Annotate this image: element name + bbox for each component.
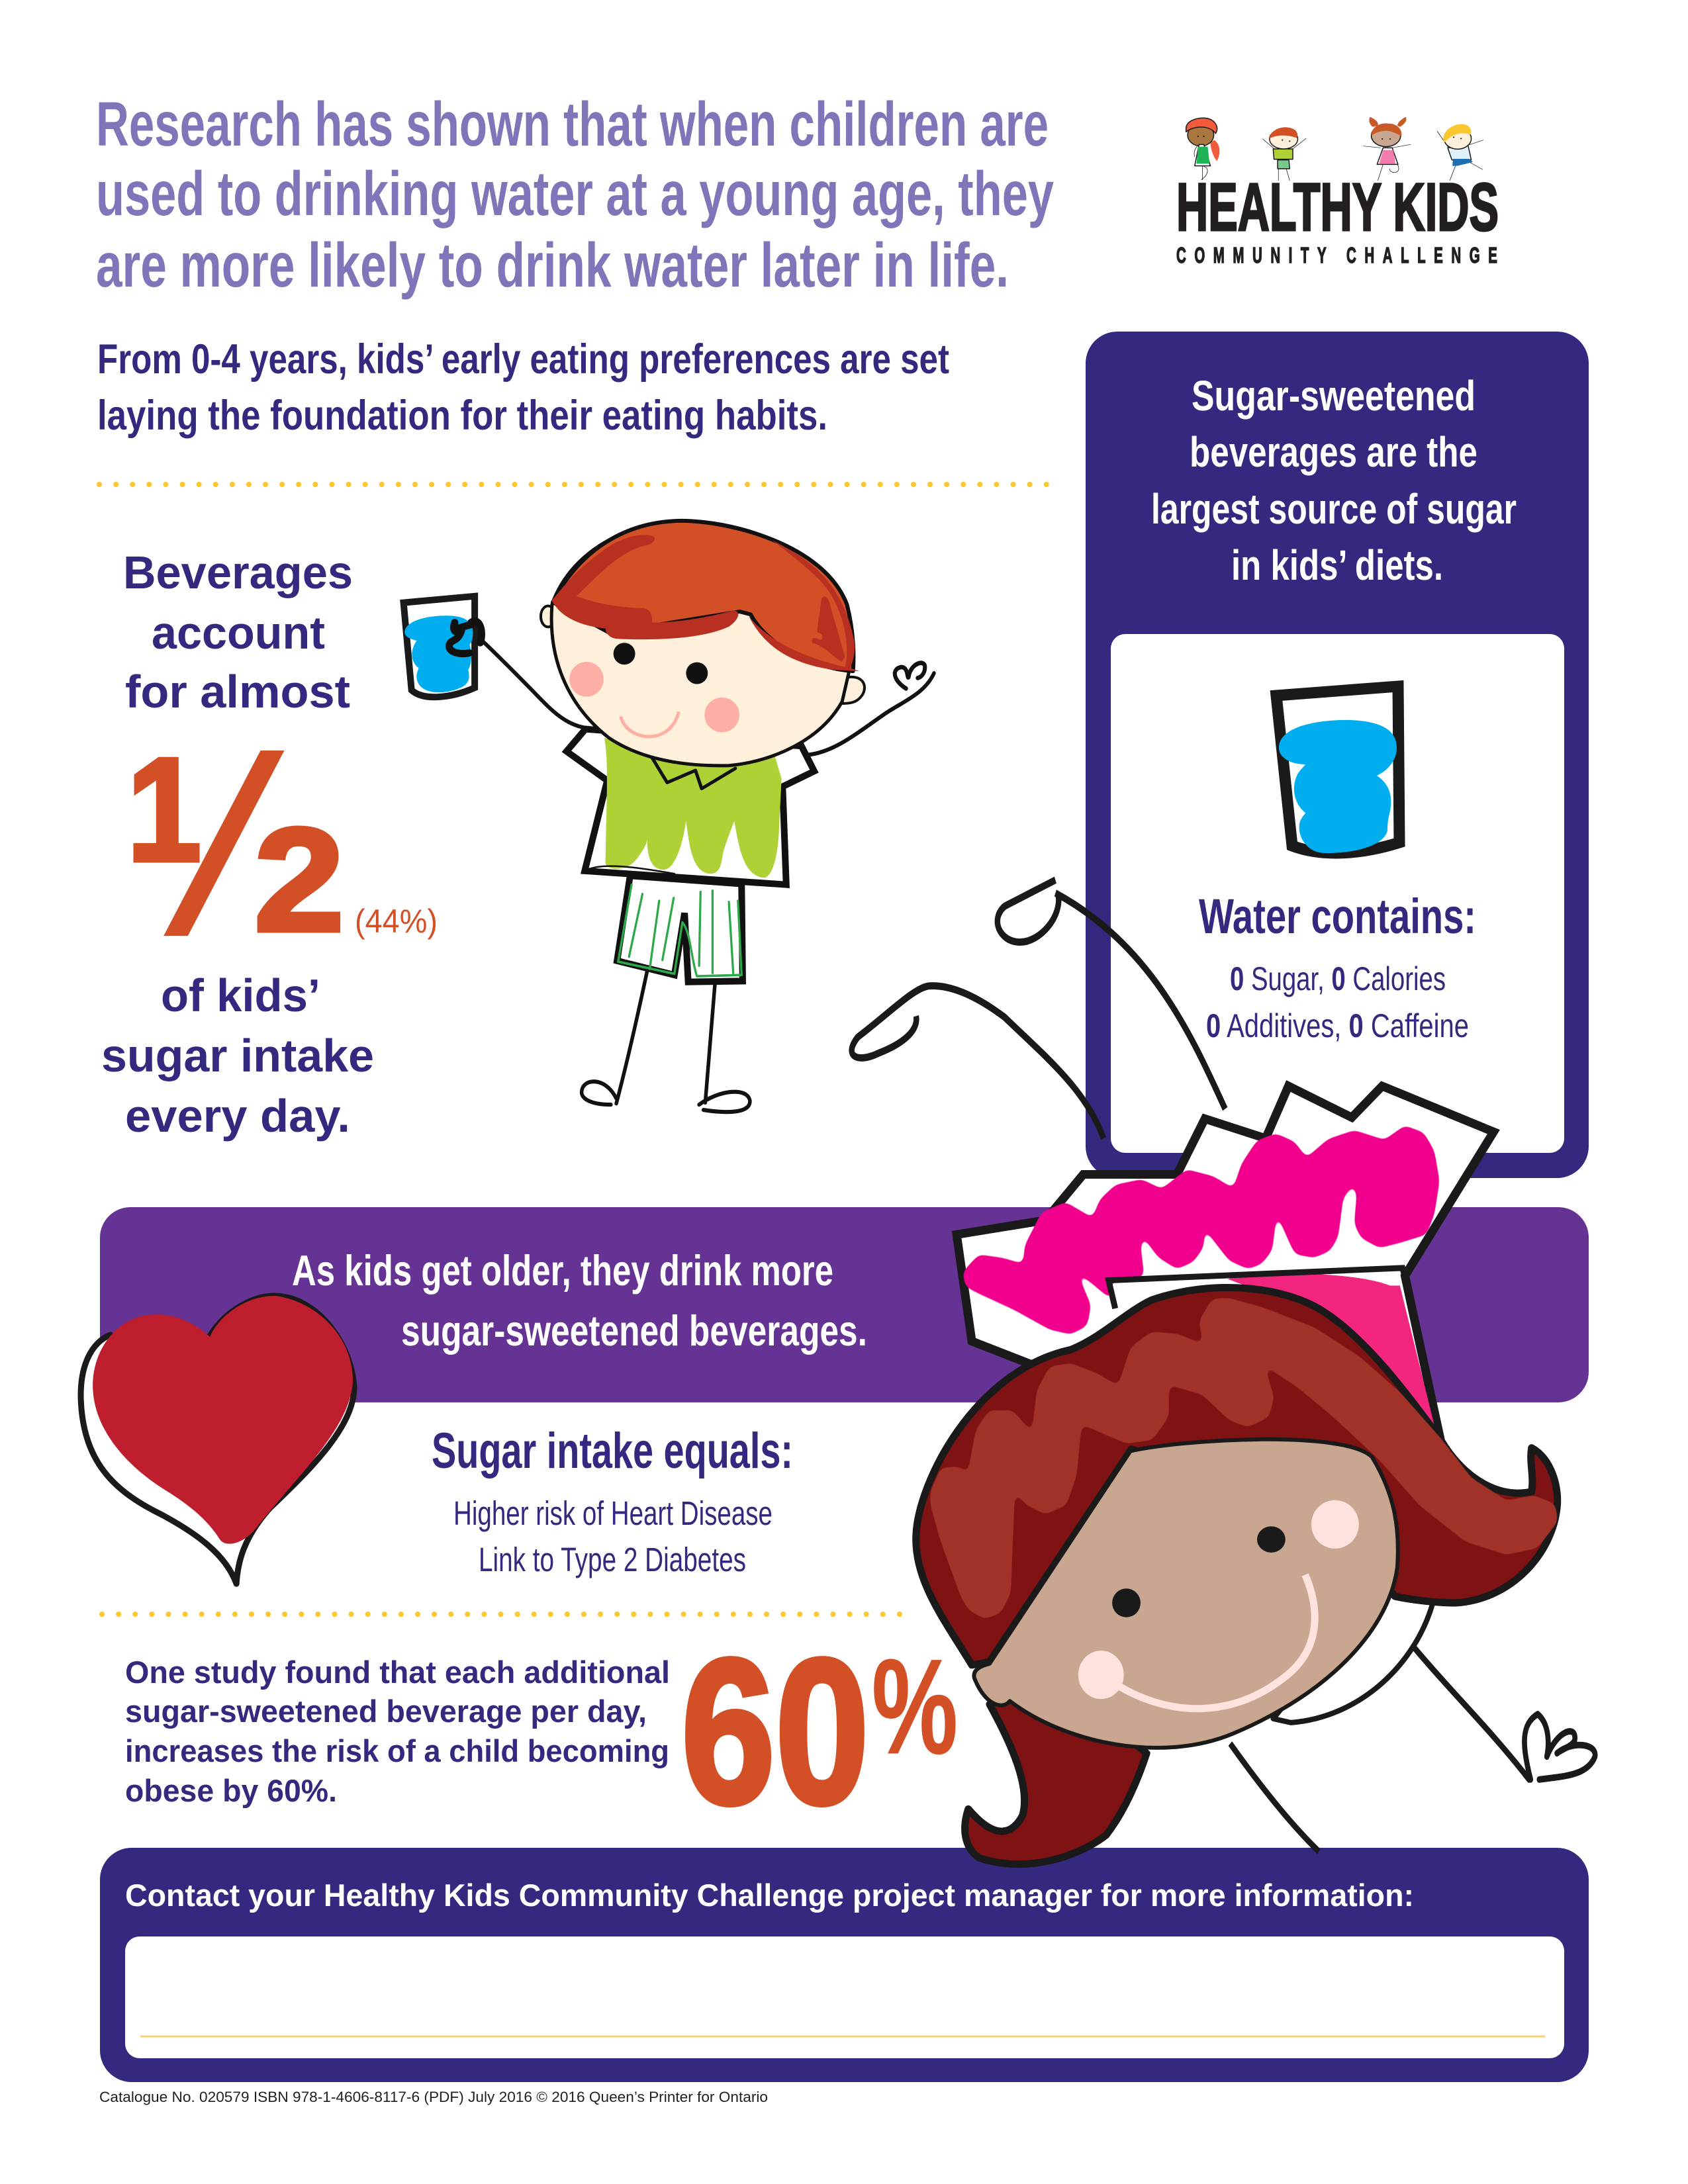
contact white box: [125, 1936, 1564, 2058]
footer: catalogue line: Catalogue No. 020579 ISBN 978-1-4606-8117-6 (PDF) July 2016 © 2016 Queen’s Printer for Ontario: [99, 2089, 768, 2105]
contact text: Contact your Healthy Kids Community Challenge project manager for more information:: [125, 1878, 1414, 1913]
illustration: girl upside down: [852, 880, 1595, 1864]
text: study finding: [125, 1655, 670, 1808]
title: research heading: [96, 89, 1054, 300]
stat outro text: [101, 970, 374, 1142]
girl body: [1273, 1580, 1433, 1723]
text: study finding: One study found that each additional: [125, 1655, 670, 1690]
girl hair: [916, 1287, 1558, 1665]
girl hair tail: [965, 1678, 1147, 1864]
band: kids get older: [100, 1207, 1589, 1402]
stat outro text: every day.: [125, 1090, 350, 1142]
dotted divider upper: [99, 482, 1049, 487]
panel heading: largest source of sugar: [1151, 485, 1517, 533]
heading: sugar intake equals: Sugar intake equals:: [432, 1423, 793, 1479]
subheading: early eating preferences: [97, 336, 949, 439]
stat intro text: [123, 547, 353, 717]
stat intro text: for almost: [125, 666, 350, 717]
stat intro text: account: [152, 607, 325, 659]
contact write-in line: [140, 2036, 1545, 2037]
text: study finding: obese by 60%.: [125, 1773, 337, 1808]
girl arms: [852, 880, 1225, 1138]
subheading: early eating preferences: laying the foundation for their eating habits.: [97, 392, 827, 439]
stat: sixty percent: 60: [681, 1617, 869, 1847]
illustration: boy with glass: [404, 521, 934, 1112]
girl dress: [957, 1086, 1493, 1514]
icon: red heart: [81, 1296, 354, 1584]
text: study finding: increases the risk of a child becoming: [125, 1733, 669, 1768]
percentage 44: (44%): [355, 903, 438, 940]
dotted divider lower: [102, 1612, 907, 1617]
list: sugar risks: [453, 1494, 773, 1578]
girl face: [974, 1439, 1398, 1748]
water contains heading: Water contains:: [1199, 889, 1476, 944]
stat: sixty percent: %: [872, 1631, 958, 1782]
band text: sugar-sweetened beverages.: [401, 1306, 867, 1355]
list: sugar risks: Link to Type 2 Diabetes: [479, 1541, 746, 1578]
panel: sugar-sweetened beverages: [1086, 332, 1589, 1178]
stat intro text: Beverages: [123, 547, 353, 598]
boy eye right: [686, 662, 708, 684]
boy glass of water: [404, 596, 481, 697]
boy eyes: [614, 643, 635, 664]
water contents list: [1206, 960, 1469, 1044]
girl dress pink scribble: [964, 1127, 1438, 1333]
title: research heading: used to drinking water at a young age, they: [96, 159, 1054, 229]
girl lower leg and hand: [1230, 1649, 1595, 1852]
fraction one half: 1: [127, 728, 201, 892]
panel heading: Sugar-sweetened: [1192, 372, 1476, 420]
logo: Healthy Kids Community Challenge: [1176, 117, 1499, 267]
stat outro text: of kids’: [161, 970, 320, 1021]
fraction one half: [127, 709, 344, 984]
boy legs and feet: [582, 971, 750, 1112]
boy head: [541, 521, 865, 766]
title: research heading: Research has shown that when children are: [96, 89, 1049, 159]
boy cheeks and smile: [569, 662, 739, 737]
panel heading: [1151, 372, 1517, 589]
boy shorts: [617, 876, 743, 982]
boy shirt: [567, 729, 814, 885]
stat outro text: sugar intake: [101, 1030, 374, 1081]
icon: glass of water: [1276, 686, 1399, 853]
band text: [292, 1246, 867, 1355]
panel: contact: [100, 1848, 1589, 2082]
stat: beverages account for almost half: [101, 547, 438, 1142]
panel heading: beverages are the: [1190, 428, 1477, 476]
text: study finding: sugar-sweetened beverage per day,: [125, 1694, 647, 1729]
inner white card: [1111, 634, 1564, 1153]
fraction one half: /: [155, 709, 293, 984]
boy hair: [551, 521, 860, 671]
subheading: early eating preferences: From 0-4 years, kids’ early eating preferences are set: [97, 336, 949, 383]
water contents list: 0 Additives, 0 Caffeine: [1206, 1007, 1469, 1044]
water contents list: 0 Sugar, 0 Calories: [1230, 960, 1446, 997]
logo wordmark: HEALTHY KIDS: [1176, 169, 1499, 245]
boy arms: [480, 639, 934, 755]
band text: As kids get older, they drink more: [292, 1246, 833, 1295]
title: research heading: are more likely to drink water later in life.: [96, 230, 1009, 300]
panel heading: in kids’ diets.: [1231, 541, 1443, 589]
logo tagline: COMMUNITY CHALLENGE: [1176, 243, 1497, 267]
icon: four logo kids: [1186, 117, 1483, 181]
list: sugar risks: Higher risk of Heart Disease: [453, 1494, 773, 1532]
fraction one half: 2: [254, 798, 344, 962]
